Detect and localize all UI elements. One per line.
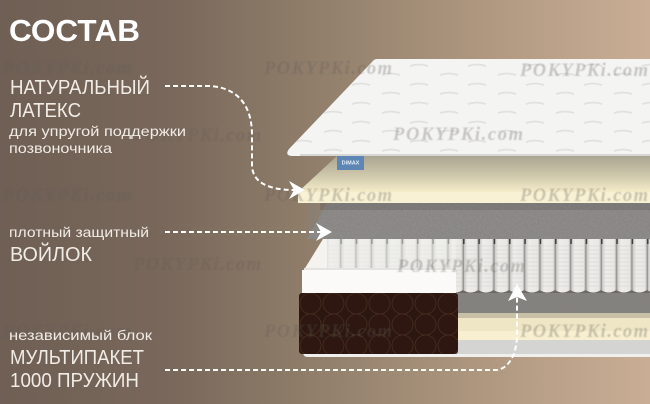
panel: mattress layers bbox=[287, 59, 650, 357]
watermark: POKYPKi.com repeated: POKYPKi.com bbox=[392, 125, 523, 145]
watermark: POKYPKi.com repeated: POKYPKi.com bbox=[396, 257, 525, 277]
quilted brown side panel bbox=[299, 293, 458, 354]
watermark: POKYPKi.com repeated: POKYPKi.com bbox=[2, 186, 131, 206]
text block: natural latex: НАТУРАЛЬНЫЙ bbox=[10, 75, 150, 99]
arrow: latex callout bbox=[165, 86, 305, 199]
watermark: POKYPKi.com repeated: POKYPKi.com bbox=[2, 322, 131, 342]
watermark: POKYPKi.com repeated: POKYPKi.com bbox=[263, 59, 392, 79]
title: СОСТАВ bbox=[9, 13, 140, 48]
lower felt layer bbox=[456, 293, 650, 313]
watermark: POKYPKi.com repeated: POKYPKi.com bbox=[132, 126, 261, 146]
brand label: DiMAX bbox=[342, 160, 360, 166]
watermark: POKYPKi.com repeated: POKYPKi.com bbox=[263, 186, 392, 206]
text block: spring unit: МУЛЬТИПАКЕТ bbox=[10, 347, 144, 369]
watermark: POKYPKi.com repeated: POKYPKi.com bbox=[519, 186, 648, 206]
watermark: POKYPKi.com repeated: POKYPKi.com bbox=[519, 322, 648, 342]
top quilted cover bbox=[287, 59, 650, 156]
watermark: POKYPKi.com repeated: POKYPKi.com bbox=[519, 61, 648, 81]
natural latex layer bbox=[298, 156, 650, 203]
text block: natural latex: для упругой поддержки bbox=[9, 123, 186, 139]
foam edge frame bbox=[302, 239, 456, 293]
arrow: felt callout bbox=[165, 223, 332, 241]
bottom cover layer bbox=[303, 340, 650, 357]
arrow: spring callout bbox=[165, 284, 527, 370]
lower natural latex layer bbox=[456, 313, 650, 340]
spring block bbox=[325, 239, 650, 293]
text block: felt: ВОЙЛОК bbox=[10, 242, 92, 266]
watermark: POKYPKi.com repeated: POKYPKi.com bbox=[263, 322, 392, 342]
text block: felt bbox=[9, 224, 149, 266]
text block: spring unit: независимый блок bbox=[9, 327, 153, 343]
brand label bbox=[337, 156, 364, 170]
watermark: POKYPKi.com repeated: POKYPKi.com bbox=[132, 255, 261, 275]
text block: felt: плотный защитный bbox=[9, 224, 149, 240]
text block: spring unit: 1000 ПРУЖИН bbox=[10, 370, 139, 392]
watermark: POKYPKi.com repeated: POKYPKi.com bbox=[2, 59, 131, 79]
text block: natural latex: ЛАТЕКС bbox=[10, 100, 81, 122]
text block: spring unit bbox=[9, 327, 153, 392]
text block: natural latex bbox=[9, 75, 186, 156]
watermark: POKYPKi.com repeated bbox=[2, 59, 648, 342]
text block: natural latex: позвоночника bbox=[9, 140, 112, 156]
felt layer bbox=[307, 203, 650, 239]
